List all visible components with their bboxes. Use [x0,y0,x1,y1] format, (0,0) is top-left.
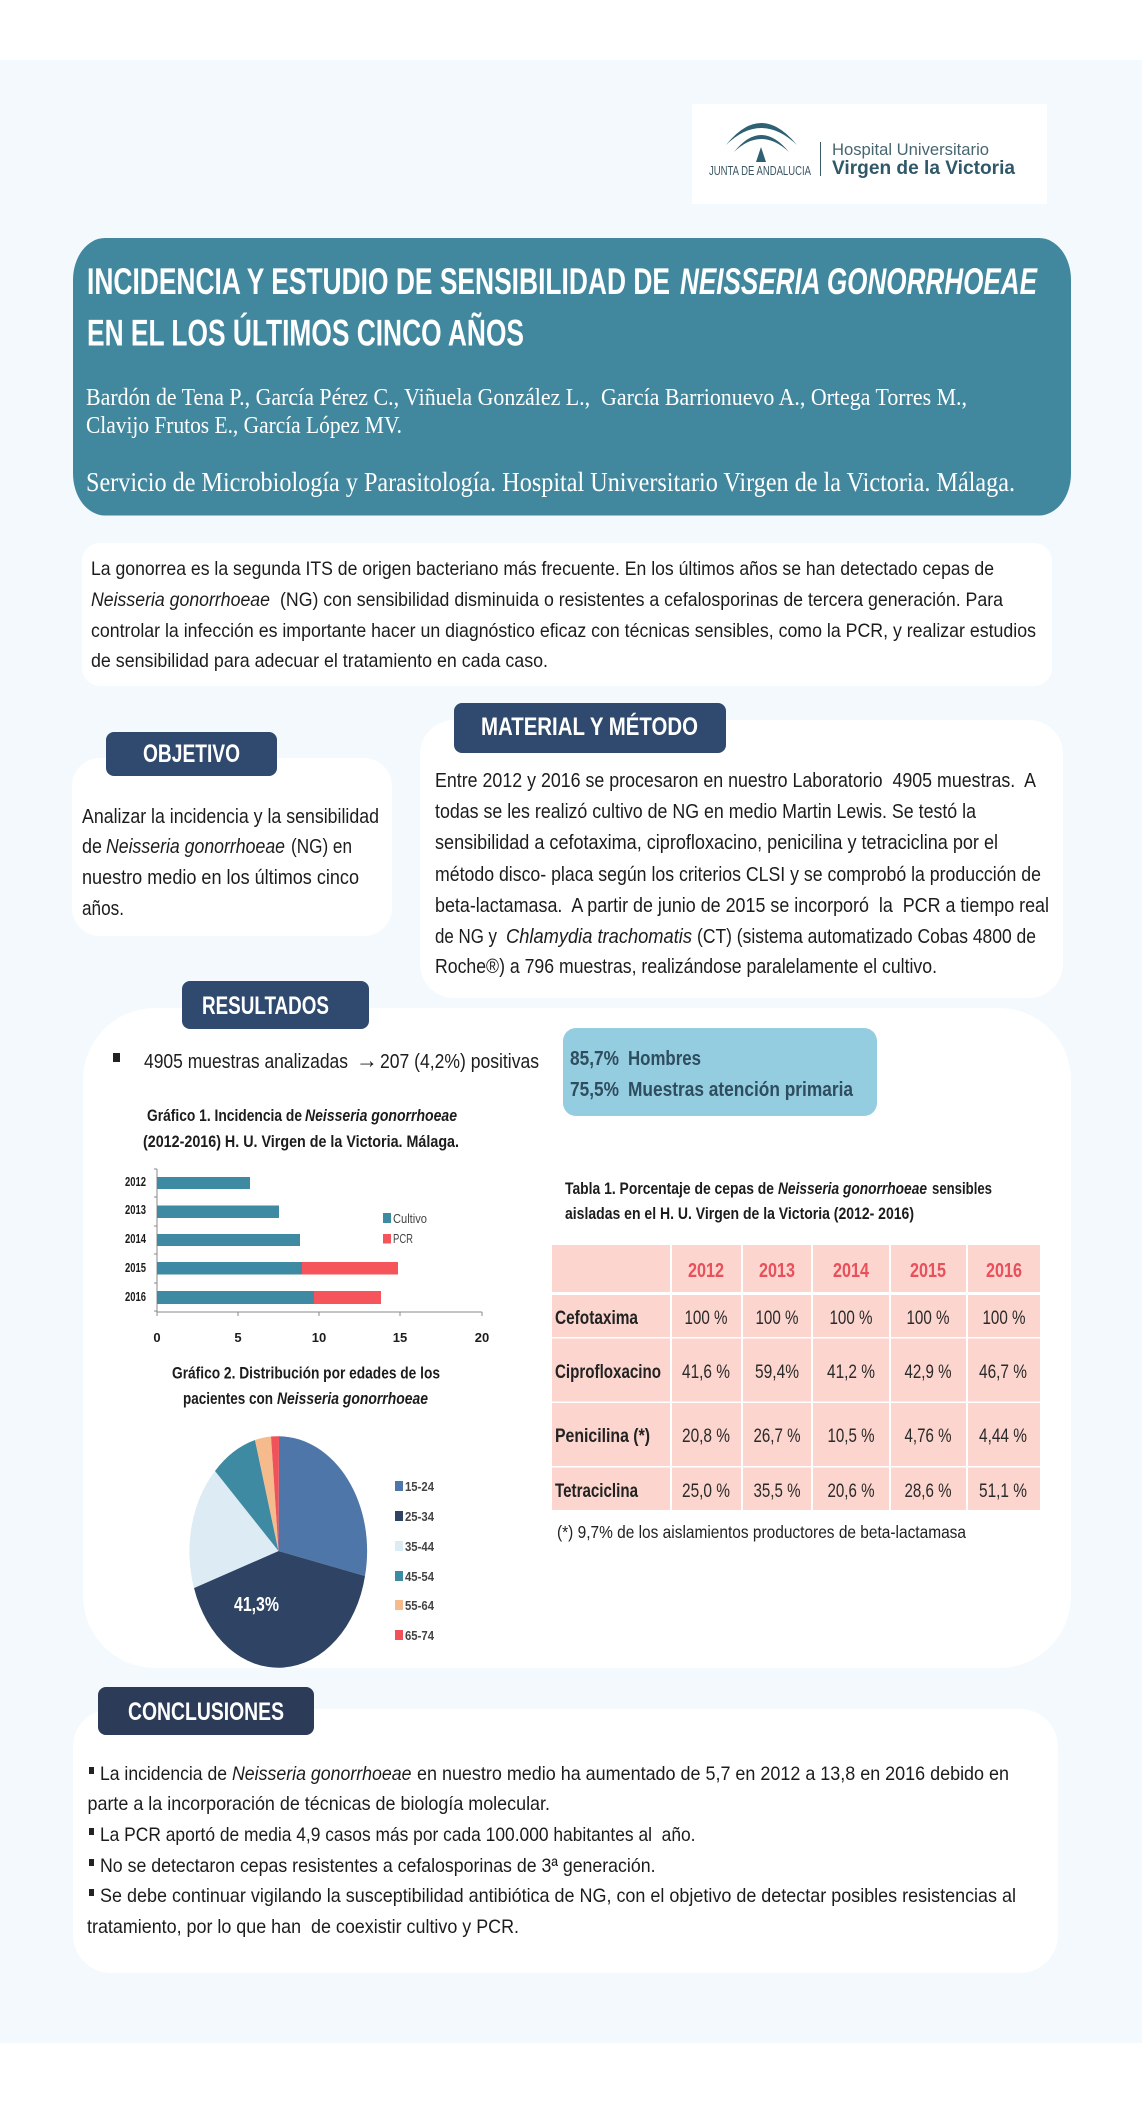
y axis labels: 2012 [125,1174,146,1189]
table row: penicilina: 20,8 % [682,1426,730,1447]
table title: Neisseria gonorrhoeae [778,1180,927,1198]
table header years: 2013 [759,1260,795,1282]
material y método text: Roche®) a 796 muestras, realizándose paralelamente el cultivo. [435,955,937,978]
heading: material y método: MATERIAL Y MÉTODO [481,712,698,741]
logo text: hospital name: Hospital Universitario [832,141,989,159]
chart title: gráfico 2 [172,1364,440,1408]
title line 2: EN EL LOS ÚLTIMOS CINCO AÑOS [87,312,524,354]
conclusiones text: en nuestro medio ha aumentado de 5,7 en 2012 a 13,8 en 2016 debido en [417,1763,1009,1785]
chart title: gráfico 2: pacientes con [183,1390,273,1408]
affiliation: Servicio de Microbiología y Parasitología. Hospital Universitario Virgen de la Victoria. Málaga. [86,466,1015,497]
material y método text: todas se les realizó cultivo de NG en medio Martin Lewis. Se testó la [435,800,977,823]
table row: cefotaxima: 100 % [756,1308,799,1329]
table row: penicilina: 4,44 % [979,1426,1027,1447]
authors [86,384,967,439]
icon: Junta de Andalucía arches [726,123,797,162]
x axis labels: 5 [234,1330,242,1345]
legend: pie chart: 65-74 [405,1628,435,1643]
legend: pie chart: 45-54 [405,1569,435,1584]
table row: penicilina: 10,5 % [828,1426,875,1447]
logo: Junta de Andalucía / Hospital Universitario Virgen de la Victoria [692,104,1047,204]
legend: pie chart: 55-64 [405,1598,435,1613]
table row: cefotaxima [555,1308,1026,1329]
x axis labels: 15 [393,1330,407,1345]
intro text: de sensibilidad para adecuar el tratamiento en cada caso. [91,650,548,672]
material y método text: Chlamydia trachomatis [506,925,692,948]
table row: tetraciclina: 20,6 % [828,1481,875,1502]
material y método text: método disco- placa según los criterios CLSI y se comprobó la producción de [435,863,1041,886]
heading: material y método [454,703,726,753]
objetivo text: años. [82,897,124,920]
callout: hombres y atención primaria: 85,7% [570,1048,619,1070]
table row: ciprofloxacino: 41,2 % [827,1362,875,1383]
table header years: 2012 [688,1260,724,1282]
table header years: 2016 [986,1260,1022,1282]
y axis labels: 2015 [125,1260,146,1275]
y axis labels: 2016 [125,1289,146,1304]
authors: Bardón de Tena P., García Pérez C., Viñuela González L., García Barrionuevo A., Ortega Torres M., [86,384,967,411]
objetivo text: Neisseria gonorrhoeae [106,835,285,858]
logo text: Junta de Andalucía: JUNTA DE ANDALUCIA [709,163,811,178]
objetivo text: Analizar la incidencia y la sensibilidad [82,805,379,828]
conclusiones text: La incidencia de [100,1763,227,1785]
conclusiones text [87,1763,1016,1938]
y axis labels [125,1174,147,1304]
chart title: gráfico 2: Gráfico 2. Distribución por edades de los [172,1364,440,1382]
table title: aisladas en el H. U. Virgen de la Victoria (2012- 2016) [565,1205,914,1223]
intro text: La gonorrea es la segunda ITS de origen bacteriano más frecuente. En los últimos años se han detectado cepas de [91,558,994,580]
heading: resultados [182,981,369,1029]
chart title: gráfico 1: (2012-2016) H. U. Virgen de la Victoria. Málaga. [143,1133,459,1151]
conclusiones text: No se detectaron cepas resistentes a cefalosporinas de 3ª generación. [100,1855,656,1877]
table row: cefotaxima: 100 % [684,1308,728,1329]
conclusiones text: La PCR aportó de media 4,9 casos más por cada 100.000 habitantes al año. [100,1824,696,1846]
material y método text: Entre 2012 y 2016 se procesaron en nuestro Laboratorio 4905 muestras. A [435,769,1036,792]
material y método text: de NG y [435,925,498,948]
table row: ciprofloxacino: 41,6 % [682,1362,730,1383]
title: INCIDENCIA Y ESTUDIO DE SENSIBILIDAD DE [87,261,670,302]
panel: title banner [73,238,1071,516]
table row: penicilina [555,1426,1027,1447]
legend: bar chart [383,1211,427,1246]
table row: cefotaxima: Cefotaxima [555,1308,638,1329]
heading: objetivo: OBJETIVO [143,740,240,768]
table title: Tabla 1. Porcentaje de cepas de [565,1180,774,1198]
heading: resultados: RESULTADOS [202,992,329,1020]
x axis labels: 10 [312,1330,326,1345]
table row: ciprofloxacino: 59,4% [755,1362,799,1383]
objetivo text: de [82,835,102,858]
key figure: samples analysed [113,1047,539,1073]
table row: tetraciclina [555,1481,1027,1502]
table row: tetraciclina: Tetraciclina [555,1481,638,1502]
callout: hombres y atención primaria [563,1028,877,1116]
logo text: hospital name: Virgen de la Victoria [832,158,1015,179]
key figure: samples analysed: 207 (4,2%) positivas [380,1051,539,1073]
heading: conclusiones [98,1687,314,1735]
table row: tetraciclina: 25,0 % [682,1481,730,1502]
heading: conclusiones: CONCLUSIONES [128,1698,284,1726]
pie value label: 41,3% [234,1594,279,1616]
chart title: gráfico 1 [143,1107,459,1151]
table row: tetraciclina: 51,1 % [979,1481,1027,1502]
table row: ciprofloxacino [555,1362,1027,1383]
callout: hombres y atención primaria: Muestras atención primaria [628,1079,854,1101]
bar chart: incidencia [125,1169,489,1345]
legend: pie chart: 35-44 [405,1539,435,1554]
chart title: gráfico 1: Gráfico 1. Incidencia de [147,1107,302,1125]
panel: resultados [83,981,1071,1668]
table title [565,1180,992,1223]
legend: bar chart: PCR [393,1231,413,1246]
conclusiones text: parte a la incorporación de técnicas de biología molecular. [88,1793,550,1815]
panel: objetivo [72,732,392,936]
key figure: samples analysed: → [356,1047,378,1073]
table row: tetraciclina: 28,6 % [904,1481,952,1502]
y axis labels: 2014 [125,1231,147,1246]
chart title: gráfico 2: Neisseria gonorrhoeae [277,1390,428,1408]
table row: cefotaxima: 100 % [906,1308,950,1329]
intro text: (NG) con sensibilidad disminuida o resistentes a cefalosporinas de tercera generación. Para [280,589,1003,611]
legend: bar chart: Cultivo [393,1211,427,1226]
bars: cultivo [157,1177,314,1304]
material y método text [435,769,1049,978]
material y método text: sensibilidad a cefotaxima, ciprofloxacino, penicilina y tetraciclina por el [435,831,998,854]
table header years [688,1260,1022,1282]
x axis labels: 0 [153,1330,161,1345]
key figure: samples analysed: 4905 muestras analizadas [144,1051,348,1073]
table row: ciprofloxacino: 42,9 % [904,1362,952,1383]
conclusiones text: Neisseria gonorrhoeae [232,1763,412,1785]
x axis labels [153,1330,489,1345]
conclusiones text: Se debe continuar vigilando la susceptibilidad antibiótica de NG, con el objetivo de detectar posibles resistencias al [100,1885,1016,1907]
pie chart: edades [189,1436,367,1668]
intro text: controlar la infección es importante hacer un diagnóstico eficaz con técnicas sensibles, como la PCR, y realizar estudios [91,620,1036,642]
chart title: gráfico 1: Neisseria gonorrhoeae [305,1107,457,1125]
table row: penicilina: 4,76 % [904,1426,952,1447]
table row: ciprofloxacino: 46,7 % [979,1362,1027,1383]
panel: material y método [420,703,1063,998]
callout: hombres y atención primaria: 75,5% [570,1079,619,1101]
material y método text: (CT) (sistema automatizado Cobas 4800 de [697,925,1036,948]
table row: penicilina: Penicilina (*) [555,1426,650,1447]
panel: introduction [82,543,1052,686]
intro text: Neisseria gonorrhoeae [91,589,270,611]
x axis labels: 20 [475,1330,489,1345]
legend: pie chart [395,1479,435,1643]
intro text [91,558,1036,672]
conclusiones text: tratamiento, por lo que han de coexistir cultivo y PCR. [87,1916,519,1938]
objetivo text: nuestro medio en los últimos cinco [82,866,359,889]
table row: ciprofloxacino: Ciprofloxacino [555,1362,661,1383]
bars: PCR [302,1262,398,1304]
legend: pie chart: 25-34 [405,1509,435,1524]
table: sensibilidad [552,1245,1040,1510]
authors: Clavijo Frutos E., García López MV. [86,412,402,439]
table header years: 2015 [910,1260,946,1282]
objetivo text [82,805,379,920]
table row: tetraciclina: 35,5 % [754,1481,801,1502]
table footnote: (*) 9,7% de los aislamientos productores de beta-lactamasa [557,1522,966,1542]
heading: objetivo [106,732,277,776]
table row: penicilina: 26,7 % [754,1426,801,1447]
callout: hombres y atención primaria: Hombres [628,1048,701,1070]
panel: conclusiones [73,1687,1058,1973]
table row: cefotaxima: 100 % [982,1308,1026,1329]
logo text: hospital name [832,141,1015,179]
table header years: 2014 [833,1260,870,1282]
table title: sensibles [932,1180,992,1198]
table row: cefotaxima: 100 % [830,1308,873,1329]
objetivo text: (NG) en [291,835,352,858]
legend: pie chart: 15-24 [405,1479,435,1494]
material y método text: beta-lactamasa. A partir de junio de 2015 se incorporó la PCR a tiempo real [435,894,1049,917]
y axis labels: 2013 [125,1202,146,1217]
